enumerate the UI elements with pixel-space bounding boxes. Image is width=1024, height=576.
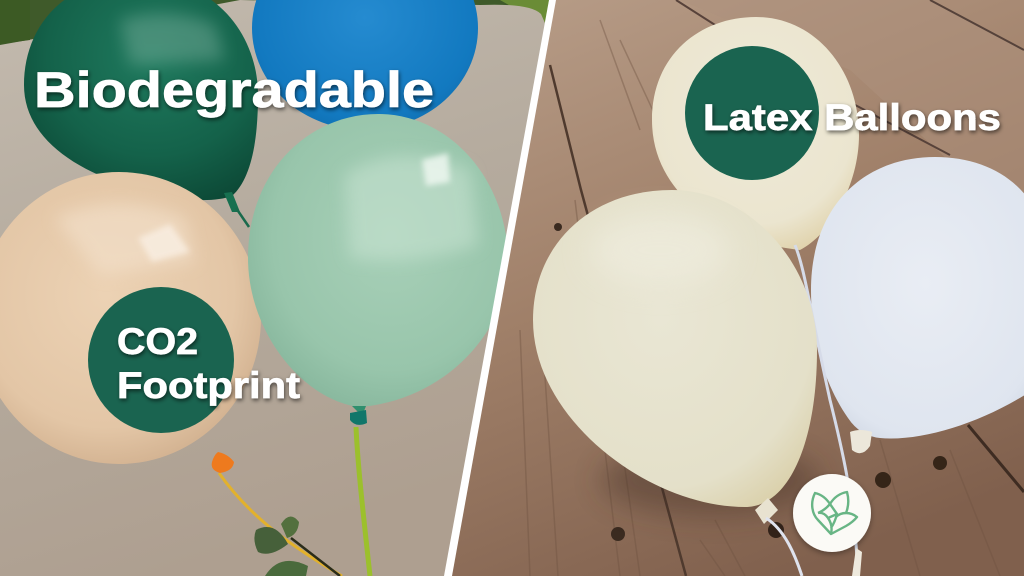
panel: right photo, latex balloons on wood deck — [448, 0, 1024, 576]
badge: latex balloons — [685, 46, 819, 180]
heading: CO2 Footprint — [117, 321, 300, 406]
panel: left photo, biodegradable balloons on concrete — [0, 0, 555, 576]
heading: CO2 Footprint: Footprint — [117, 365, 300, 406]
heading: Biodegradable: Biodegradable — [34, 62, 434, 118]
balloon: cream large — [533, 190, 817, 507]
balloon: cream top — [652, 17, 859, 250]
balloon: mint — [248, 114, 508, 425]
heading: CO2 Footprint: CO2 — [117, 321, 198, 362]
badge: CO2 footprint — [88, 287, 234, 433]
ribbon: yellow — [219, 473, 342, 576]
balloon shadow — [600, 445, 820, 515]
divider line — [444, 0, 556, 576]
balloon knot and string — [755, 498, 778, 524]
balloon knot: orange — [212, 452, 234, 473]
plant leaves — [254, 516, 340, 576]
balloon: blue — [252, 0, 478, 130]
icon: leaf logo badge — [793, 474, 871, 552]
balloon: peach — [0, 172, 261, 464]
heading: Latex Balloons: Latex Balloons — [703, 97, 1001, 138]
balloon: dark green — [24, 0, 258, 227]
balloon: white — [811, 157, 1024, 453]
ribbon: green — [356, 427, 370, 576]
strings — [795, 245, 858, 576]
